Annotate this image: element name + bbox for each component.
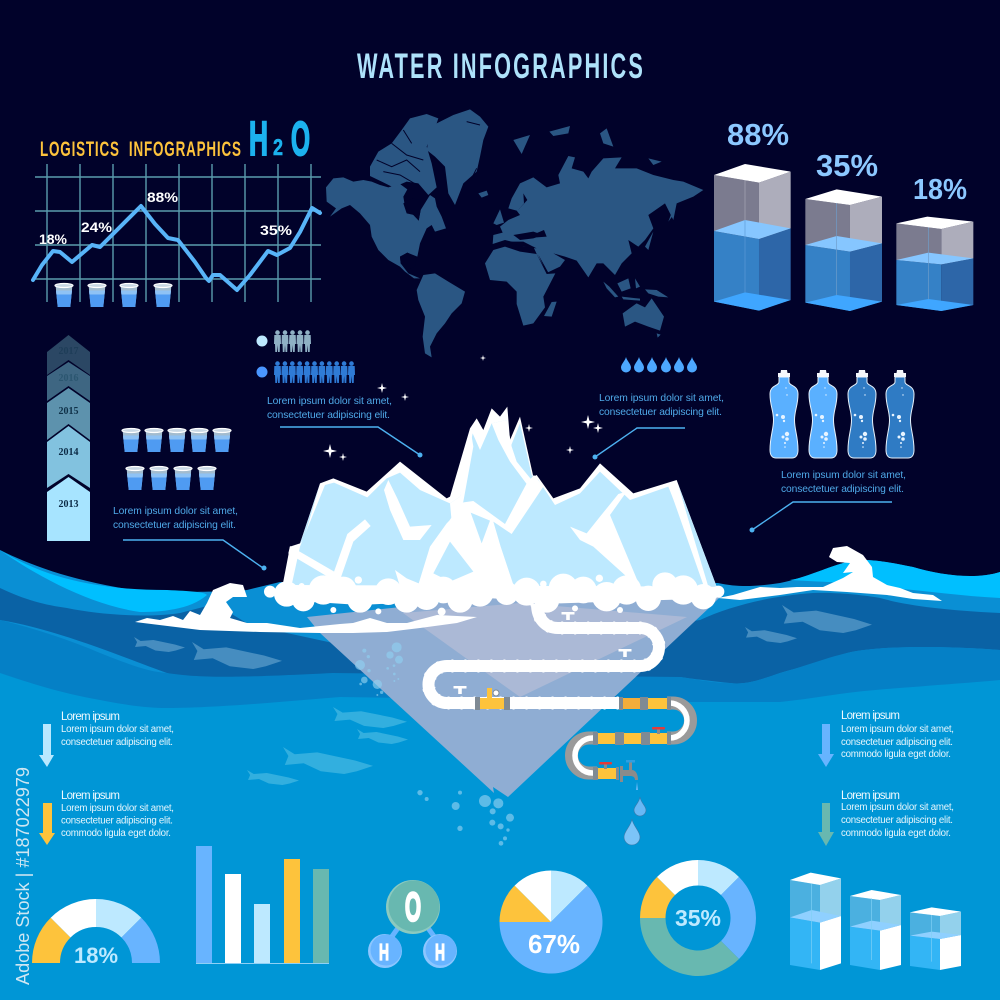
data labels: 24%	[81, 219, 113, 235]
isometric glass columns	[790, 873, 961, 970]
year chevrons timeline	[47, 335, 90, 541]
grey bends	[572, 703, 690, 773]
text + arrow: lower left 2: Lorem ipsum dolor sit amet,	[61, 803, 174, 814]
pipeline	[428, 604, 690, 782]
percentages	[727, 117, 967, 206]
text block: mid-right caption: consectetuer adipiscing elit.	[599, 407, 722, 418]
iceberg: above water	[282, 407, 717, 590]
heading: H2O	[249, 113, 310, 166]
percentages: 88%	[727, 117, 789, 152]
text + arrow: lower right 2	[818, 790, 954, 846]
text + arrow: lower left 2: commodo ligula eget dolor.	[61, 828, 171, 839]
percentages: 18%	[913, 174, 967, 206]
trend line	[33, 206, 320, 290]
heading: H2O: H	[249, 113, 268, 166]
text + arrow: lower right 1	[818, 710, 954, 767]
columns	[714, 164, 973, 311]
data labels	[39, 189, 293, 247]
chart cups	[55, 284, 172, 307]
text + arrow: lower right 2: commodo ligula eget dolor.	[841, 828, 951, 839]
text + arrow: lower left 2: Lorem ipsum	[61, 790, 120, 802]
text + arrow: lower left 1: Lorem ipsum dolor sit amet,	[61, 724, 174, 735]
cups group	[122, 428, 231, 490]
bottles	[770, 370, 914, 458]
data labels: 35%	[260, 222, 293, 238]
water molecule: H	[435, 939, 445, 965]
donut chart 35%	[640, 860, 756, 976]
text block: mid-left caption	[267, 396, 392, 421]
year labels: 2016	[58, 373, 78, 384]
water molecule: H	[379, 939, 389, 965]
half-donut chart 18%	[32, 899, 160, 968]
half-donut chart 18%: 18%	[74, 943, 118, 968]
yellow couplings	[475, 688, 671, 780]
year labels: 2017	[58, 346, 78, 357]
year labels: 2015	[58, 406, 78, 417]
fish	[134, 605, 872, 785]
air bubbles	[355, 642, 514, 846]
people pictogram legend	[256, 330, 355, 383]
red valves	[599, 727, 665, 769]
text + arrow: lower right 1: commodo ligula eget dolor.	[841, 749, 951, 760]
text block: right caption: consectetuer adipiscing elit.	[781, 484, 904, 495]
heading: H2O: O	[291, 113, 310, 166]
text block: mid-right caption: Lorem ipsum dolor sit amet,	[599, 393, 724, 404]
heading: logistics infographics: LOGISTICS INFOGRAPHICS	[40, 137, 241, 161]
callout leader lines	[123, 427, 892, 570]
white pipe	[428, 604, 659, 703]
valves on white pipe	[454, 612, 632, 694]
iceberg: underwater part	[307, 590, 720, 797]
iceberg foam bubbles	[264, 572, 724, 616]
text block: mid-left caption: consectetuer adipiscing elit.	[267, 410, 390, 421]
world map	[326, 109, 703, 357]
data labels: 18%	[39, 231, 68, 247]
year labels	[58, 346, 78, 510]
text + arrow: lower right 1: consectetuer adipiscing elit.	[841, 737, 953, 748]
pie chart 67%	[500, 870, 602, 974]
year labels: 2014	[58, 447, 78, 458]
percentages: 35%	[816, 148, 878, 183]
water drop row	[621, 357, 697, 372]
text + arrow: lower right 2: Lorem ipsum	[841, 790, 900, 802]
water molecule: O	[405, 886, 421, 930]
heading: H2O: 2	[273, 134, 283, 160]
data labels: 88%	[147, 189, 179, 205]
right wave foam	[718, 546, 942, 601]
stars	[323, 355, 603, 461]
stat: isometric columns 88% 35% 18%	[714, 117, 973, 311]
pie chart 67%: 67%	[528, 929, 580, 959]
falling water drops	[624, 782, 646, 845]
text + arrow: lower right 1: Lorem ipsum	[841, 710, 900, 722]
text + arrow: lower right 1: Lorem ipsum dolor sit amet,	[841, 724, 954, 735]
ocean layers	[0, 550, 1000, 1000]
line chart with cups	[33, 164, 321, 307]
text + arrow: lower right 2: consectetuer adipiscing elit.	[841, 815, 953, 826]
donut chart 35%: 35%	[675, 905, 721, 931]
text + arrow: lower left 1	[39, 711, 174, 767]
tap	[620, 760, 638, 782]
text block: left caption	[113, 506, 238, 531]
text block: mid-left caption: Lorem ipsum dolor sit amet,	[267, 396, 392, 407]
bar chart	[196, 846, 329, 964]
vertical stock credit: Adobe Stock | #187022979	[12, 767, 33, 985]
text block: right caption: Lorem ipsum dolor sit amet,	[781, 470, 906, 481]
text block: right caption	[781, 470, 906, 495]
text + arrow: lower left 2: consectetuer adipiscing elit.	[61, 816, 173, 826]
text + arrow: lower left 1: consectetuer adipiscing elit.	[61, 737, 173, 748]
left wave foam	[135, 583, 477, 633]
text block: left caption: Lorem ipsum dolor sit amet,	[113, 506, 238, 517]
year labels: 2013	[58, 499, 78, 510]
text + arrow: lower left 2	[39, 790, 174, 845]
title: WATER INFOGRAPHICS	[357, 48, 643, 86]
text block: mid-right caption	[599, 393, 724, 418]
text block: left caption: consectetuer adipiscing elit.	[113, 520, 236, 531]
water molecule	[368, 880, 457, 968]
text + arrow: lower right 2: Lorem ipsum dolor sit amet,	[841, 802, 954, 813]
text + arrow: lower left 1: Lorem ipsum	[61, 711, 120, 723]
